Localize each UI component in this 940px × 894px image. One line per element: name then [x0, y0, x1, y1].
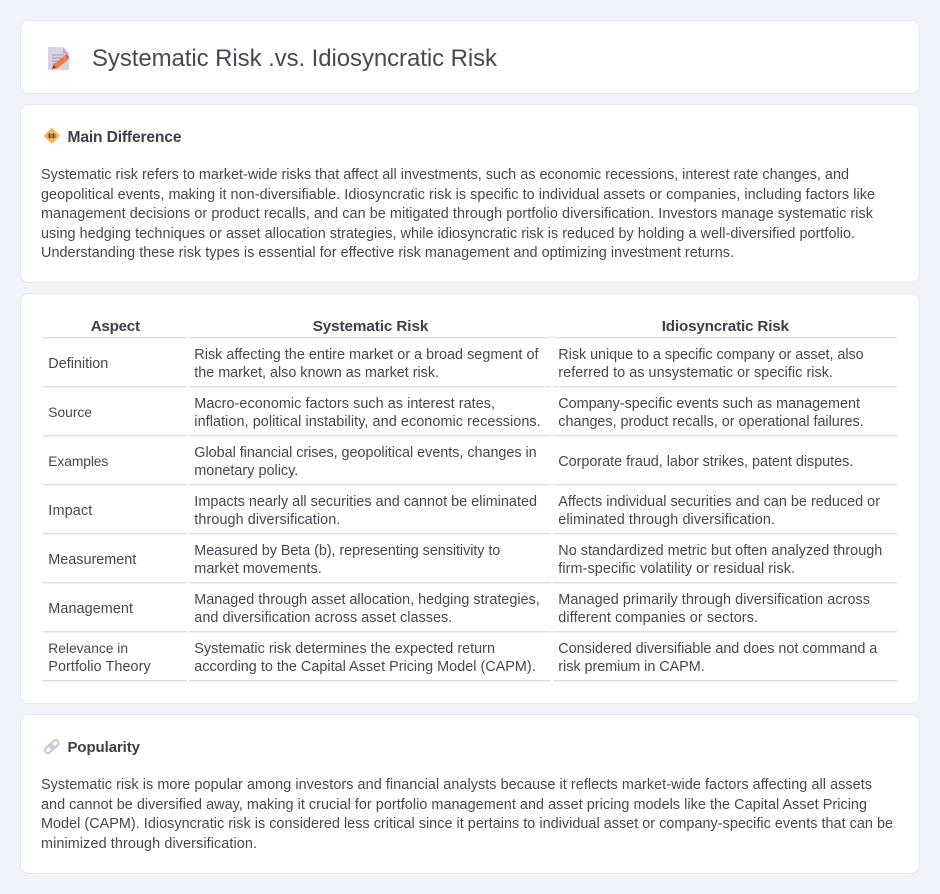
text block: main difference: Systematic risk refers to market-wide risks that affect all investments, such as economic recessions, interest rate changes, and: [41, 167, 849, 183]
row: measurement: firm-specific volatility or residual risk.: [558, 561, 795, 577]
title: Systematic Risk .vs. Idiosyncratic Risk: [92, 45, 498, 72]
row: relevance in portfolio theory: Relevance in: [48, 641, 128, 656]
row: measurement: Measurement: [48, 552, 136, 568]
row: examples: Corporate fraud, labor strikes, patent disputes.: [558, 454, 853, 470]
row: relevance in portfolio theory: Systematic risk determines the expected return: [194, 641, 495, 657]
panel: popularity card: [20, 714, 920, 874]
row: impact: Impact: [48, 503, 92, 519]
row: management: Managed through asset allocation, hedging strategies,: [194, 592, 540, 608]
text block: main difference: geopolitical events, making it non-diversifiable. Idiosyncratic risk is specific to individual assets or companies, including factors like: [41, 187, 875, 203]
row: relevance in portfolio theory: risk premium in CAPM.: [558, 659, 705, 675]
text block: main difference: management decisions or product recalls, and can be mitigated through portfolio diversification. Investors manage systematic risk: [41, 206, 874, 222]
row: management: different companies or sectors.: [558, 610, 758, 626]
row: relevance in portfolio theory: according to the Capital Asset Pricing Model (CAPM).: [194, 659, 536, 675]
text block: popularity: minimized through diversification.: [41, 836, 257, 852]
row: definition: Risk unique to a specific company or asset, also: [558, 347, 864, 363]
row: management: and diversification across asset classes.: [194, 610, 452, 626]
row: examples: Global financial crises, geopolitical events, changes in: [194, 445, 537, 461]
table header row: [91, 318, 790, 335]
row: source: changes, product recalls, or operational failures.: [558, 414, 864, 430]
row: source: Source: [48, 405, 92, 420]
panel: comparison card: [20, 294, 920, 704]
panel: title card: [20, 20, 920, 94]
icon: document with pencil: [48, 47, 70, 70]
heading: main difference: Main Difference: [68, 129, 182, 146]
row: impact: [48, 494, 880, 528]
row: source: inflation, political instability, and economic recessions.: [194, 414, 541, 430]
text block: main difference: Understanding these risk types is essential for effective risk management and optimizing investment returns.: [41, 245, 734, 261]
row: management: Managed primarily through diversification across: [558, 592, 870, 608]
row: management: [48, 592, 870, 626]
row: examples: [48, 445, 853, 479]
row: measurement: market movements.: [194, 561, 322, 577]
row: impact: Affects individual securities and can be reduced or: [558, 494, 880, 510]
row: definition: [48, 347, 864, 381]
table header row: Aspect: [91, 318, 140, 335]
text block: main difference: using hedging techniques or asset allocation strategies, while idiosyncratic risk is reduced by holding a well-diversified portfolio.: [41, 226, 855, 242]
row: impact: through diversification.: [194, 512, 340, 528]
text block: popularity: Model (CAPM). Idiosyncratic risk is considered less critical since it pertains to individual asset or company-specific events that can be: [41, 816, 893, 832]
row: definition: Risk affecting the entire market or a broad segment of: [194, 347, 540, 363]
row: definition: the market, also known as market risk.: [194, 365, 439, 381]
text block: main difference: [41, 167, 875, 261]
row: measurement: Measured by Beta (b), representing sensitivity to: [194, 543, 500, 559]
icon: chain link: [44, 739, 60, 754]
row: examples: monetary policy.: [194, 463, 298, 479]
row: relevance in portfolio theory: Portfolio Theory: [48, 659, 151, 675]
icon: warning diamond: [44, 128, 60, 144]
row: examples: Examples: [48, 454, 108, 469]
row: source: Company-specific events such as management: [558, 396, 860, 412]
table header row: Systematic Risk: [313, 318, 429, 335]
row: measurement: No standardized metric but often analyzed through: [558, 543, 882, 559]
panel: main difference card: [20, 104, 920, 282]
row: management: Management: [48, 601, 133, 617]
row: relevance in portfolio theory: [48, 641, 877, 675]
table header row: Idiosyncratic Risk: [662, 318, 790, 335]
row: definition: referred to as unsystematic or specific risk.: [558, 365, 833, 381]
heading: popularity: Popularity: [68, 739, 141, 756]
text block: popularity: [41, 777, 893, 852]
row: impact: Impacts nearly all securities and cannot be eliminated: [194, 494, 537, 510]
text block: popularity: and cannot be diversified away, making it crucial for portfolio management and asset pricing models like the Capital Asset Pricing: [41, 797, 867, 813]
row: definition: Definition: [48, 356, 108, 372]
row: source: Macro-economic factors such as interest rates,: [194, 396, 495, 412]
row: measurement: [48, 543, 882, 577]
comparison table: [43, 318, 897, 681]
text block: popularity: Systematic risk is more popular among investors and financial analysts because it reflects market-wide factors affecting all assets: [41, 777, 872, 793]
row: impact: eliminated through diversification.: [558, 512, 775, 528]
row: relevance in portfolio theory: Considered diversifiable and does not command a: [558, 641, 877, 657]
row: source: [48, 396, 864, 430]
